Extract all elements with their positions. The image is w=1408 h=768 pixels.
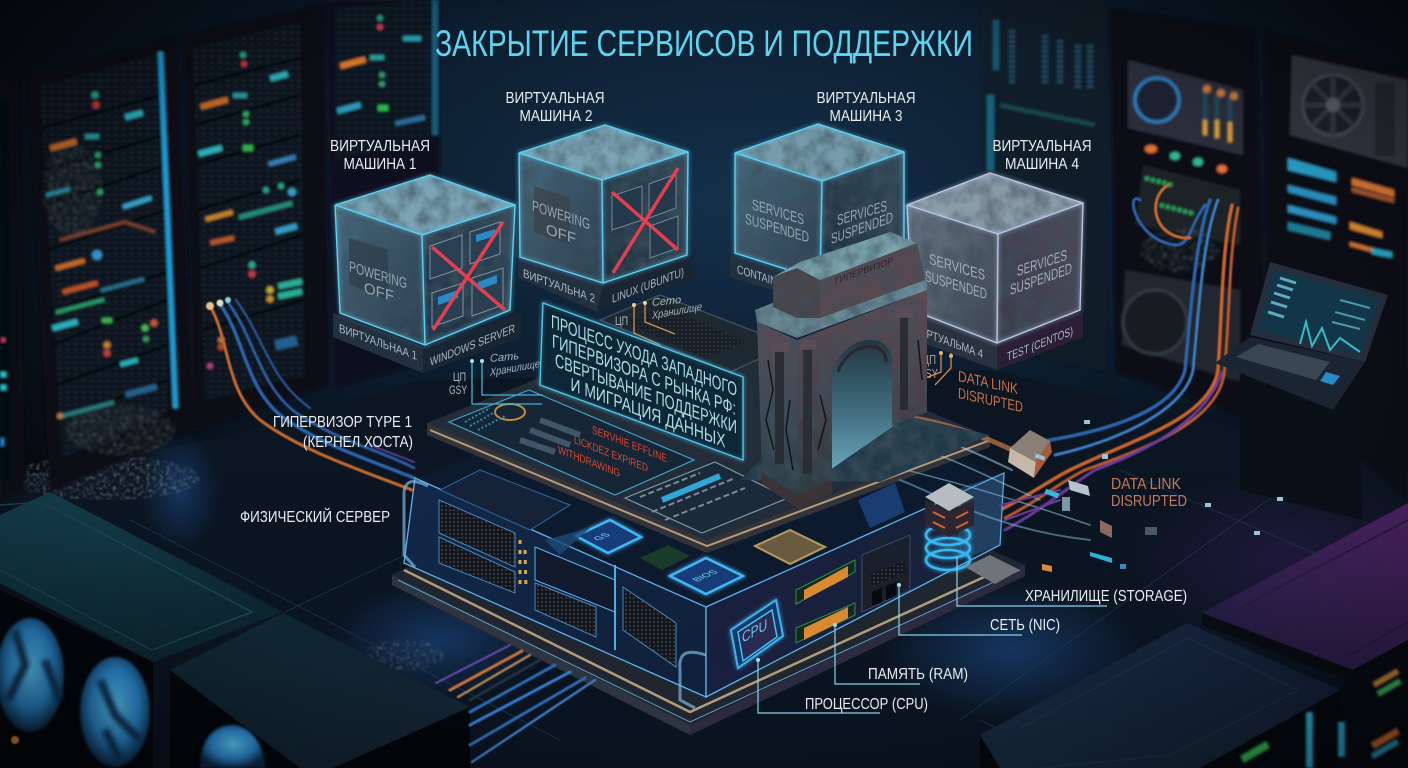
physical server chassis <box>404 365 1004 708</box>
vm cube <box>735 124 904 280</box>
attic left block <box>773 268 820 318</box>
ledge <box>755 277 927 338</box>
columns and base <box>762 308 913 508</box>
left server racks <box>0 0 440 500</box>
vm base <box>518 255 693 312</box>
physical server base plate <box>392 420 1025 735</box>
wiring labels: GSY <box>449 383 467 397</box>
hypervisor label: (КЕРНЕЛ ХОСТА) <box>303 434 413 451</box>
error messages <box>558 424 667 480</box>
label vm 2: МАШИНА 2 <box>520 108 593 125</box>
arch front wall <box>797 290 927 495</box>
arch opening haze <box>830 320 895 470</box>
hypervisor label <box>273 414 413 451</box>
wiring labels <box>449 294 938 397</box>
process billboard <box>540 303 743 460</box>
virtual machine 3 <box>730 124 910 305</box>
blue chip <box>1090 552 1112 563</box>
services suspended right <box>831 198 893 248</box>
interior chips <box>440 470 1004 594</box>
data streams <box>840 414 1090 540</box>
base labels: ИРТУАЛЬМА 4 <box>920 324 983 361</box>
glowing chip 1: GS <box>591 532 614 542</box>
leader: memory: ПАМЯТЬ (RAM) <box>868 666 968 683</box>
label vm 3: МАШИНА 3 <box>830 108 903 125</box>
error messages: WITHDRAWING <box>558 444 620 480</box>
grille 4 <box>623 587 676 667</box>
vm resource wiring <box>470 301 953 404</box>
vm labels <box>330 90 1092 173</box>
wiring labels: Сать <box>490 350 519 365</box>
glowing chip 2: BIOS <box>690 569 721 583</box>
left floor cables <box>206 297 414 490</box>
service tiles <box>612 174 678 258</box>
data link disrupted note upper: DATA LINK <box>958 368 1018 398</box>
wiring labels: Хранилище <box>651 301 702 322</box>
error messages: SERVHIE EFFLINE <box>592 424 667 465</box>
left pier <box>757 322 797 495</box>
chassis left face <box>404 478 706 708</box>
services suspended right: SERVICES <box>837 198 887 229</box>
label vm 4: ВИРТУАЛЬНАЯ <box>992 138 1092 155</box>
base labels <box>523 265 684 306</box>
gold chip <box>755 530 825 564</box>
label vm 3: ВИРТУАЛЬНАЯ <box>816 90 916 107</box>
rack C <box>325 0 440 388</box>
title: ЗАКРЫТИЕ СЕРВИСОВ И ПОДДЕРЖКИ <box>435 23 973 64</box>
box 1 <box>0 492 283 768</box>
rack lights <box>1240 668 1402 768</box>
rack R1 <box>980 0 1108 372</box>
rubble base <box>740 405 990 482</box>
floor <box>0 370 1408 768</box>
vm base <box>912 310 1083 370</box>
bottom cables into server <box>436 645 595 762</box>
attic top <box>773 232 917 280</box>
wiring labels: ЦП <box>453 370 466 384</box>
services suspended right: SUSPENDED <box>831 209 893 248</box>
triumphal arch ruin: ГИПЕРВИЗОР <box>835 255 893 286</box>
grille 1 <box>439 500 515 567</box>
label vm 2 <box>506 90 604 125</box>
patch panel <box>1135 165 1240 245</box>
services suspended right: SUSPENDED <box>1010 260 1072 299</box>
services suspended left: SERVICES <box>929 251 985 284</box>
NIC ports <box>862 535 910 612</box>
powering off: POWERING <box>349 259 407 293</box>
vm cube <box>519 125 688 283</box>
red cross <box>612 168 678 273</box>
vm cube <box>335 175 515 345</box>
leader: network <box>897 583 1060 635</box>
chassis top <box>415 365 1004 607</box>
RAM module 2 <box>796 603 855 643</box>
data link disrupted note upper: DISRUPTED <box>958 385 1023 416</box>
purple box <box>1202 503 1408 768</box>
base labels <box>920 324 1073 364</box>
services suspended left: SUSPENDED <box>925 268 987 303</box>
base labels <box>339 321 515 369</box>
migration panel <box>625 462 788 533</box>
grille 3 <box>535 583 596 637</box>
powering off: OFF <box>546 221 576 248</box>
billboard text <box>551 311 737 453</box>
vm cube <box>907 173 1083 343</box>
cracks <box>766 340 922 470</box>
base labels: TEST (CENTOS) <box>1007 324 1073 364</box>
rack R2 <box>1110 8 1270 425</box>
vm base <box>730 250 910 305</box>
services suspended right <box>1010 247 1072 299</box>
leader: storage <box>957 557 1187 606</box>
data link disrupted note lower: DATA LINK <box>1111 476 1181 493</box>
socket traces <box>600 295 790 372</box>
billboard text: СВЕРТЫВАНИЕ ПОДДЕРЖКИ <box>555 350 737 439</box>
rack B <box>183 5 330 432</box>
box 2 <box>170 613 470 768</box>
physical server label: ФИЗИЧЕСКИЙ СЕРВЕР <box>240 507 390 526</box>
data link disrupted note lower: DISRUPTED <box>1111 493 1187 510</box>
fan panel <box>1128 60 1243 155</box>
leader: memory <box>833 623 968 684</box>
label vm 1: ВИРТУАЛЬНАЯ <box>330 138 430 155</box>
right server racks <box>980 0 1408 500</box>
virtual machine 1 <box>333 175 522 373</box>
right cables <box>1000 185 1238 530</box>
debris <box>1035 420 1283 569</box>
bottom-left hardware boxes <box>0 492 470 768</box>
base labels: ВИРТУАЛЬНА 2 <box>523 266 595 306</box>
loose module <box>1068 480 1112 538</box>
wiring labels: ЦП <box>922 352 936 367</box>
data link fragments <box>1008 420 1283 572</box>
leader: network: СЕТЬ (NIC) <box>990 617 1060 634</box>
chassis right face <box>706 473 1004 697</box>
label vm 2: ВИРТУАЛЬНАЯ <box>506 90 604 107</box>
error messages: LICKDEZ EXPIRED <box>574 434 648 475</box>
vm base <box>333 313 522 373</box>
ruptured connector box <box>1008 430 1052 478</box>
billboard text: И МИГРАЦИЯ ДАННЫХ <box>570 374 726 453</box>
billboard text: ПРОЦЕСС УХОДА ЗАПАДНОГО <box>551 311 737 401</box>
bottom-right hardware boxes <box>980 503 1408 768</box>
powering off <box>532 198 590 248</box>
orange chip <box>1042 564 1052 572</box>
billboard text: ГИПЕРВИЗОРА С РЫНКА РФ: <box>552 331 736 420</box>
CPU chip <box>731 600 783 668</box>
powering off <box>349 259 407 305</box>
glowing chip 2 <box>670 558 743 594</box>
triumphal arch ruin <box>740 232 990 508</box>
services suspended right: SERVICES <box>1017 247 1067 280</box>
services suspended left <box>745 196 809 247</box>
data link disrupted note upper <box>958 368 1023 416</box>
archivolt <box>838 346 886 372</box>
red cross <box>432 222 505 330</box>
services suspended left <box>925 251 987 303</box>
label vm 3 <box>816 90 916 125</box>
grille 2 <box>439 537 515 593</box>
base labels: LINUX (UBUNTU) <box>612 265 684 306</box>
base label: CONTAINER <box>737 262 789 293</box>
virtual machine 4 <box>907 173 1083 370</box>
leader: storage: ХРАНИЛИЩЕ (STORAGE) <box>1025 588 1187 605</box>
wiring labels: ЦП <box>615 314 628 328</box>
wiring labels: Сето <box>652 294 681 309</box>
rack A <box>28 36 195 492</box>
leader: processor: ПРОЦЕССОР (CPU) <box>805 696 928 713</box>
rack R3 <box>1265 30 1408 500</box>
attic front <box>820 243 925 318</box>
label vm 4 <box>992 138 1092 173</box>
virtual machine 2 <box>518 125 693 312</box>
glowing chip 1 <box>576 520 641 553</box>
wiring labels: GSY <box>918 366 938 381</box>
hypervisor layer slab <box>427 314 990 553</box>
wiring labels: Хранилище <box>489 358 540 379</box>
status screen panel <box>449 390 694 495</box>
hypervisor label: ГИПЕРВИЗОР TYPE 1 <box>273 414 412 431</box>
label vm 4: МАШИНА 4 <box>1005 156 1079 173</box>
RAM module 1 <box>796 560 855 604</box>
label vm 1 <box>330 138 430 173</box>
powering off: OFF <box>364 280 394 305</box>
CPU chip: CPU <box>742 616 767 647</box>
base labels: ВИРТУАЛЬНАА 1 <box>339 321 417 363</box>
glass corner haze <box>955 473 1004 560</box>
leader: processor <box>756 658 928 713</box>
powering off: POWERING <box>532 198 590 233</box>
rack 0 <box>0 76 25 500</box>
dark box <box>980 623 1340 768</box>
base labels: WINDOWS SERVER <box>430 321 515 369</box>
label vm 1: МАШИНА 1 <box>344 156 417 173</box>
storage stack <box>925 483 1020 584</box>
laptop terminal <box>1215 262 1388 520</box>
service tiles <box>430 222 503 327</box>
data link disrupted note lower <box>1111 476 1187 510</box>
services suspended left: SERVICES <box>752 196 804 229</box>
services suspended left: SUSPENDED <box>745 211 809 247</box>
